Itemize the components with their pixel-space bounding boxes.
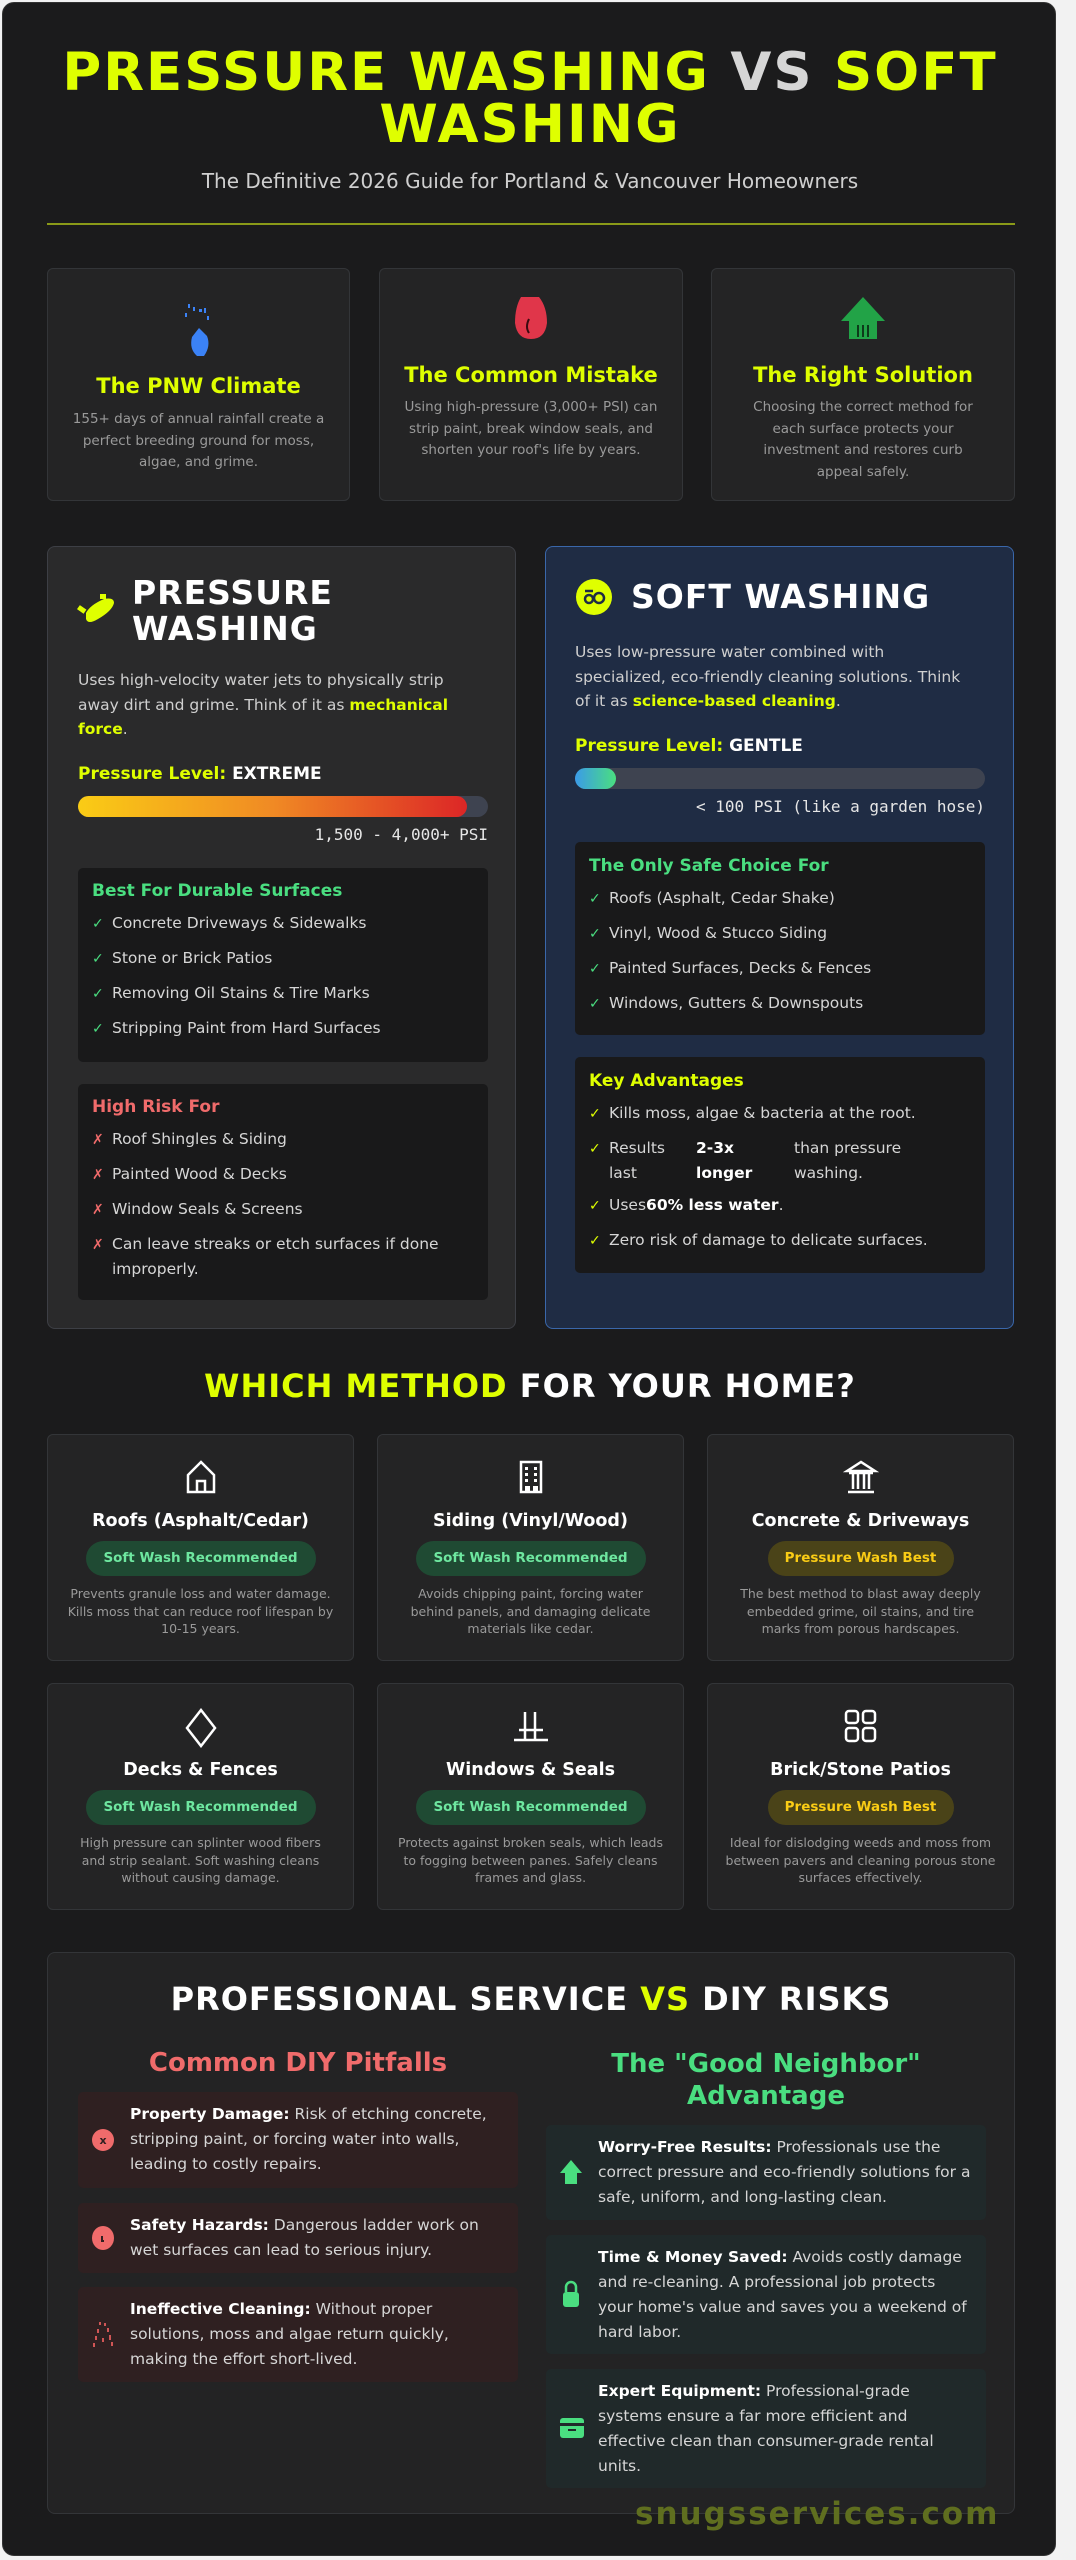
box: key advantages: ✓ xyxy=(589,1198,601,1214)
method card: patios: Pressure Wash Best xyxy=(785,1799,936,1815)
subtitle: The Definitive 2026 Guide for Portland & Vancouver Homeowners xyxy=(202,169,858,193)
method card: concrete xyxy=(707,1434,1014,1661)
column heading: DIY pitfalls: Common DIY Pitfalls xyxy=(149,2048,447,2078)
method card: patios xyxy=(707,1683,1014,1910)
box: best for: ✓ xyxy=(92,986,104,1002)
box: only safe choice: Windows, Gutters & Downspouts xyxy=(609,994,863,1012)
description: Uses high-velocity water jets to physically strip away dirt and grime. Think of it as mechanical force. xyxy=(78,671,448,738)
pressure bar xyxy=(575,768,985,789)
box: high risk: Can leave streaks or etch surfaces if done improperly. xyxy=(112,1235,439,1278)
box: key advantages: Zero risk of damage to delicate surfaces. xyxy=(609,1231,928,1249)
method card: roofs: Soft Wash Recommended xyxy=(103,1550,298,1566)
box: best for: ✓ xyxy=(92,1021,104,1037)
panel: soft washing: < 100 PSI (like a garden hose) xyxy=(696,797,985,816)
icon: soft wash xyxy=(576,579,612,615)
method card: roofs xyxy=(47,1434,354,1661)
box: only safe choice xyxy=(575,842,985,1035)
method card: siding: Siding (Vinyl/Wood) xyxy=(433,1511,628,1531)
pitfall: ineffective: Ineffective Cleaning: Without proper solutions, moss and algae return quickly, making the effort short-lived. xyxy=(130,2300,449,2368)
icon: diamond xyxy=(186,1708,216,1748)
box: only safe choice: Painted Surfaces, Decks & Fences xyxy=(609,959,871,977)
box: best for xyxy=(78,868,488,1062)
method card: decks: Decks & Fences xyxy=(123,1760,278,1780)
box: high risk: Window Seals & Screens xyxy=(112,1200,303,1218)
advantage: time & money: Time & Money Saved: Avoids costly damage and re-cleaning. A professional job protects your home's value and saves you a weekend of hard labor. xyxy=(598,2248,967,2341)
box: only safe choice: Roofs (Asphalt, Cedar Shake) xyxy=(609,889,835,907)
box: key advantages: Key Advantages xyxy=(589,1071,744,1091)
method card: decks: Soft Wash Recommended xyxy=(103,1799,298,1815)
method card: decks: High pressure can splinter wood fibers and strip sealant. Soft washing cleans without causing damage. xyxy=(80,1835,321,1885)
title xyxy=(62,42,998,155)
column heading: good neighbor: Advantage xyxy=(687,2081,845,2111)
box: key advantages: than pressure washing. xyxy=(794,1139,901,1182)
panel: professional vs DIY xyxy=(47,1952,1015,2514)
method card: patios: Ideal for dislodging weeds and moss from between pavers and cleaning porous stone surfaces effectively. xyxy=(726,1835,995,1885)
box: only safe choice: Vinyl, Wood & Stucco Siding xyxy=(609,924,827,942)
column heading: good neighbor: The "Good Neighbor" xyxy=(611,2049,921,2079)
box: key advantages: ✓ xyxy=(589,1141,601,1157)
box: high risk: ✗ xyxy=(92,1132,104,1148)
box: high risk xyxy=(78,1084,488,1300)
card: right solution: The Right Solution xyxy=(753,363,973,387)
box: best for: Stone or Brick Patios xyxy=(112,949,272,967)
icon: house xyxy=(186,1460,216,1494)
box: best for: ✓ xyxy=(92,916,104,932)
box: best for: Best For Durable Surfaces xyxy=(92,881,342,901)
panel: pressure washing: 1,500 - 4,000+ PSI xyxy=(315,825,488,844)
advantage: worry-free: Worry-Free Results: Professionals use the correct pressure and eco-friendly solutions for a safe, uniform, and long-lasting clean. xyxy=(598,2138,970,2206)
pressure bar xyxy=(78,796,488,817)
panel: pressure washing xyxy=(47,546,516,1329)
box: key advantages: ✓ xyxy=(589,1233,601,1249)
heading: WASHING xyxy=(132,609,318,648)
heading: PROFESSIONAL SERVICE VS DIY RISKS xyxy=(171,1980,891,2018)
icon: columns xyxy=(843,1460,879,1494)
pitfall: property damage xyxy=(78,2092,518,2188)
box: high risk: Painted Wood & Decks xyxy=(112,1165,287,1183)
advantage: worry-free xyxy=(546,2125,986,2220)
card: right solution xyxy=(711,268,1015,501)
advantage: expert equipment xyxy=(546,2369,986,2488)
method card: concrete: Concrete & Driveways xyxy=(752,1511,969,1531)
method card: windows: Windows & Seals xyxy=(446,1760,615,1780)
box: high risk: ✗ xyxy=(92,1237,104,1253)
box: high risk: ✗ xyxy=(92,1202,104,1218)
card: common mistake: The Common Mistake xyxy=(404,363,658,387)
advantage: expert equipment: Expert Equipment: Professional-grade systems ensure a far more efficient and effective clean than consumer-grade rental units. xyxy=(598,2382,934,2475)
icon: red drop xyxy=(515,297,547,339)
pitfall: property damage: Property Damage: Risk of etching concrete, stripping paint, or forcing water into walls, leading to costly repairs. xyxy=(130,2105,487,2173)
pitfall: safety hazards: Safety Hazards: Dangerous ladder work on wet surfaces can lead to serious injury. xyxy=(130,2216,479,2259)
card: PNW climate xyxy=(47,268,350,501)
box: only safe choice: ✓ xyxy=(589,996,601,1012)
box: key advantages xyxy=(575,1057,985,1273)
heading: SOFT WASHING xyxy=(631,577,930,616)
method card: roofs: Prevents granule loss and water damage. Kills moss that can reduce roof lifespan by 10-15 years. xyxy=(68,1586,333,1636)
icon: building xyxy=(520,1460,542,1494)
box: key advantages: Kills moss, algae & bacteria at the root. xyxy=(609,1104,916,1122)
title: WASHING xyxy=(379,94,681,155)
watermark: snugsservices.com xyxy=(635,2496,999,2532)
pitfall: ineffective xyxy=(78,2287,518,2382)
box: key advantages: Uses60% less water. xyxy=(609,1196,784,1214)
pressure level: Pressure Level: EXTREME xyxy=(78,764,322,784)
card: PNW climate: 155+ days of annual rainfall create a perfect breeding ground for moss, algae, and grime. xyxy=(73,411,324,470)
method card: siding xyxy=(377,1434,684,1661)
advantage: time & money xyxy=(546,2235,986,2354)
card: right solution: Choosing the correct method for each surface protects your investment and restores curb appeal safely. xyxy=(753,399,973,480)
box: key advantages: Results last xyxy=(609,1139,665,1182)
method card: windows: Soft Wash Recommended xyxy=(433,1799,628,1815)
card: common mistake xyxy=(379,268,683,501)
method card: concrete: The best method to blast away deeply embedded grime, oil stains, and tire marks from porous hardscapes. xyxy=(740,1586,981,1636)
box: best for: Concrete Driveways & Sidewalks xyxy=(112,914,367,932)
title: PRESSURE WASHING VS SOFT xyxy=(62,42,998,103)
pitfall: property damage: x xyxy=(99,2134,107,2147)
box: high risk: High Risk For xyxy=(92,1097,220,1117)
box: key advantages: 2-3x longer xyxy=(696,1139,752,1182)
box: best for: Removing Oil Stains & Tire Marks xyxy=(112,984,370,1002)
method card: windows: Protects against broken seals, which leads to fogging between panes. Safely cleans frames and glass. xyxy=(398,1835,663,1885)
box: best for: Stripping Paint from Hard Surfaces xyxy=(112,1019,381,1037)
method card: windows xyxy=(377,1683,684,1910)
method card: siding: Soft Wash Recommended xyxy=(433,1550,628,1566)
card: common mistake: Using high-pressure (3,000+ PSI) can strip paint, break window seals, and shorten your roof's life by years. xyxy=(404,399,658,458)
method card: patios: Brick/Stone Patios xyxy=(770,1760,951,1780)
icon: rain drop xyxy=(185,304,209,356)
icon: pressure nozzle xyxy=(77,594,114,622)
column heading: good neighbor xyxy=(611,2049,921,2111)
method card: concrete: Pressure Wash Best xyxy=(785,1550,936,1566)
box: high risk: Roof Shingles & Siding xyxy=(112,1130,287,1148)
panel: soft washing xyxy=(545,546,1014,1329)
box: only safe choice: ✓ xyxy=(589,891,601,907)
box: high risk: ✗ xyxy=(92,1167,104,1183)
icon: window frame xyxy=(514,1712,548,1742)
box: best for: ✓ xyxy=(92,951,104,967)
method card: decks xyxy=(47,1683,354,1910)
description: Uses low-pressure water combined with specialized, eco-friendly cleaning solutions. Think of it as science-based cleaning. xyxy=(575,643,960,710)
pitfall: safety hazards xyxy=(78,2203,518,2273)
section heading: which method: WHICH METHOD FOR YOUR HOME? xyxy=(204,1367,856,1405)
box: only safe choice: ✓ xyxy=(589,961,601,977)
box: key advantages: ✓ xyxy=(589,1106,601,1122)
heading: PRESSURE xyxy=(132,573,333,612)
icon: green house xyxy=(841,297,885,339)
box: only safe choice: ✓ xyxy=(589,926,601,942)
heading xyxy=(132,573,333,648)
method card: siding: Avoids chipping paint, forcing water behind panels, and damaging delicate materials like cedar. xyxy=(411,1586,650,1636)
box: only safe choice: The Only Safe Choice For xyxy=(589,856,829,876)
card: PNW climate: The PNW Climate xyxy=(96,374,301,398)
method card: roofs: Roofs (Asphalt/Cedar) xyxy=(92,1511,309,1531)
icon: pavers xyxy=(844,1710,876,1742)
pressure level: Pressure Level: GENTLE xyxy=(575,736,803,756)
